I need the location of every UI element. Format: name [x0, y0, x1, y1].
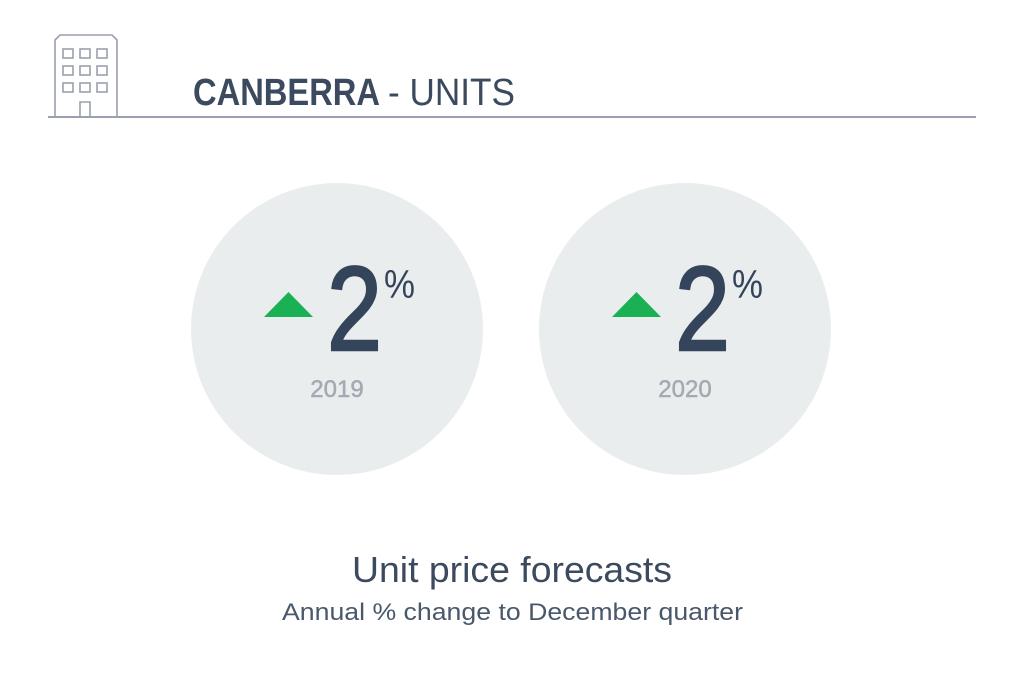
panel: 2020 forecast: 2020	[658, 376, 712, 403]
title: CANBERRA	[193, 72, 380, 114]
panel: 2019 forecast: 2019	[310, 376, 364, 403]
panel: 2019 forecast: %	[384, 263, 415, 307]
panel: 2019 forecast: 2	[327, 242, 382, 376]
panel: 2020 forecast: %	[732, 263, 763, 307]
panel: 2020 forecast	[539, 183, 831, 475]
heading: unit price forecasts: Unit price forecasts	[352, 549, 672, 590]
title: - UNITS	[388, 72, 515, 114]
subtitle: Annual % change to December quarter	[282, 599, 743, 626]
icon: building	[55, 35, 117, 117]
title	[193, 72, 515, 114]
icon: up triangle 2019	[264, 292, 313, 317]
panel: 2019 forecast	[191, 183, 483, 475]
panel: 2020 forecast: 2	[675, 242, 730, 376]
icon: up triangle 2020	[612, 292, 661, 317]
